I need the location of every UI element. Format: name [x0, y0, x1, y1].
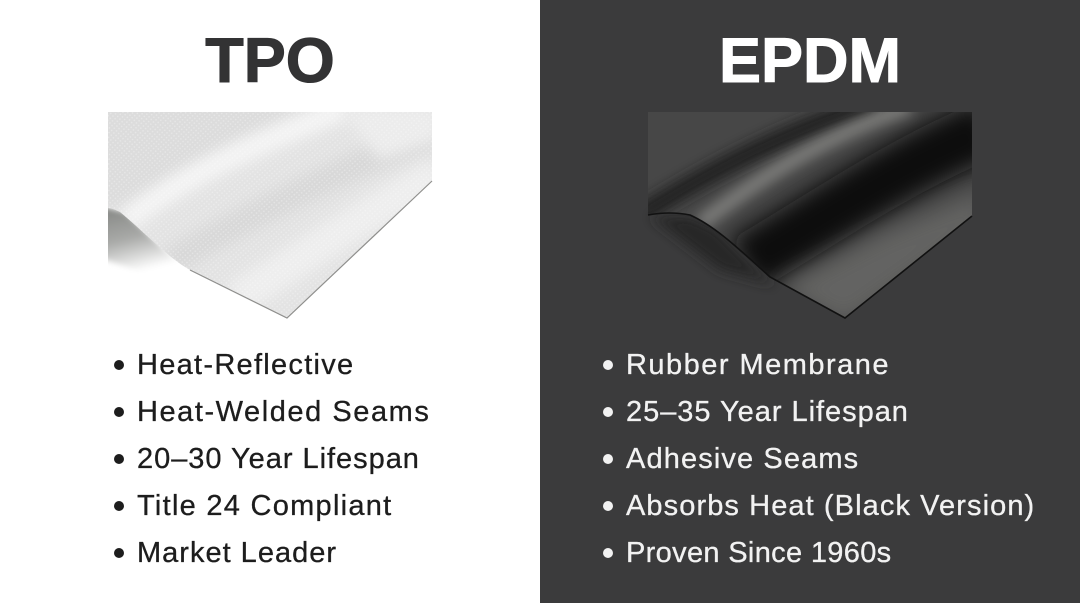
list: TPO features: Heat-Reflective	[137, 349, 354, 381]
image: white TPO membrane sheet	[108, 112, 432, 319]
list: EPDM features: Proven Since 1960s	[626, 537, 892, 569]
image: black EPDM membrane sheet	[648, 112, 972, 319]
list: TPO features	[114, 349, 430, 569]
list: TPO features: Heat-Welded Seams	[137, 396, 430, 428]
list: EPDM features	[603, 349, 1035, 569]
list: EPDM features: Absorbs Heat (Black Version)	[626, 490, 1035, 522]
list: EPDM features: Rubber Membrane	[626, 349, 890, 381]
list: EPDM features: Adhesive Seams	[626, 443, 859, 475]
heading: EPDM: EPDM	[719, 26, 901, 96]
list: TPO features: Title 24 Compliant	[137, 490, 392, 522]
panel: EPDM	[540, 0, 1080, 603]
panel: TPO	[108, 37, 432, 562]
list: EPDM features: 25–35 Year Lifespan	[626, 396, 909, 428]
heading: TPO: TPO	[205, 26, 335, 96]
list: TPO features: 20–30 Year Lifespan	[137, 443, 420, 475]
list: TPO features: Market Leader	[137, 537, 337, 569]
